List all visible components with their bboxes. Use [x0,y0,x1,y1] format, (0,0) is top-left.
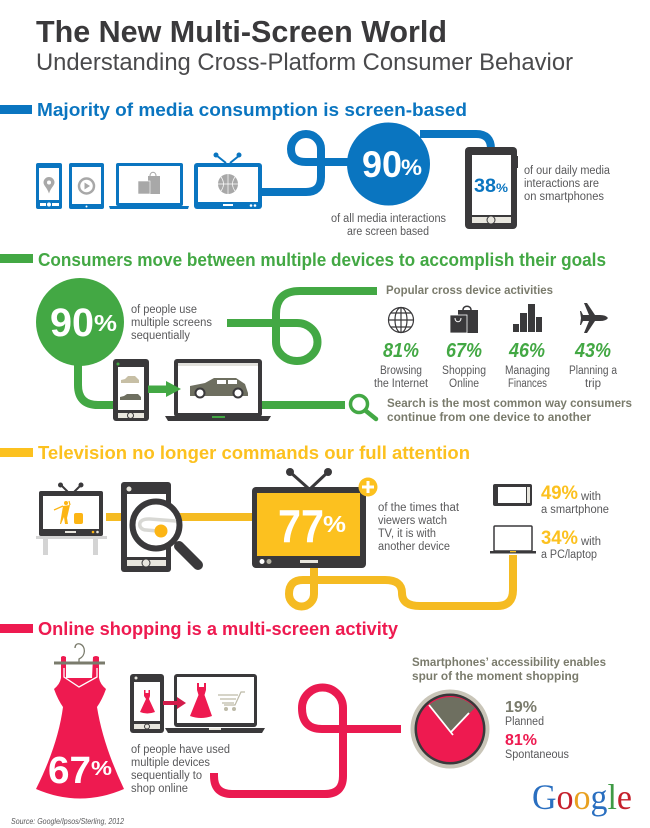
icon: red dress on hanger [36,644,124,798]
stat: 34% with a PC/laptop [541,528,601,561]
connector pipe: yellow horizontal [106,513,254,521]
stat circle: 90% sequential: % [94,310,117,336]
stat: 81% spontaneous: Spontaneous [505,749,569,761]
stat: 81% spontaneous: 81% [505,732,537,749]
labels: activity names [374,365,618,390]
stat: 49% with a smartphone: 49% [541,483,578,504]
icon: small laptop [490,526,536,554]
icon: smartphone showing 38% [465,147,518,229]
chart: clock pie 19 / 81 [410,690,490,768]
icon: tablet with play button [69,163,104,209]
callout: search [387,396,632,424]
caption: all media interactions: are screen based [347,226,429,238]
title: Understanding Cross-Platform Consumer Behavior [36,49,573,76]
icon: laptop with dress and cart [165,674,265,733]
caption: daily media interactions: of our daily media [524,165,611,177]
connector pipe: blue loop [260,134,350,192]
caption: multiple devices: of people have used [131,744,230,756]
stat: 81% spontaneous [505,732,569,761]
panel: online shopping [0,618,606,798]
labels: activity names: Finances [508,378,547,390]
stat: 49% with a smartphone: with [580,491,601,503]
panel: television [0,442,609,606]
stat circle: 90% screen based: 90 [362,144,402,185]
heading: media consumption: Majority of media consumption is screen-based [37,99,467,120]
icon: large television with 77%: 77 [278,500,324,552]
stat circle: 90% sequential [36,278,124,366]
callout: search: Search is the most common way consumers [387,396,632,410]
connector pipe: red loop to clock [214,687,401,794]
caption: viewers watch tv: TV, it is with [378,528,436,540]
source note: Source: Google/Ipsos/Sterling, 2012 [11,816,124,826]
panel: multiple devices [0,249,632,424]
icon: phone with map pin [36,163,62,209]
stat: 49% with a smartphone [541,483,609,516]
icon: television with basketball [194,152,262,209]
labels: activity names: Planning a [569,365,618,377]
subheading: spur of the moment [412,655,606,683]
caption: viewers watch tv [378,502,460,553]
stat: 19% planned: Planned [505,716,544,728]
caption: daily media interactions: interactions are [524,178,599,190]
icon: shopping bags [450,306,478,333]
heading: television: Television no longer commands our full attention [38,442,470,463]
caption: multiple devices: sequentially to [131,770,202,782]
icon: bar chart [513,304,542,332]
icon: smartphone showing 38%: % [496,181,508,195]
caption: viewers watch tv: viewers watch [378,515,447,527]
caption: multiple screens [131,304,212,342]
stat: 49% with a smartphone: a smartphone [541,504,609,516]
stats: activity percentages: 67% [446,340,482,362]
caption: daily media interactions [524,165,611,203]
caption: multiple devices: multiple devices [131,757,210,769]
subheading: popular activities: Popular cross device activities [386,283,553,297]
icon: red dress on hanger: % [91,758,112,780]
stat: 34% with a PC/laptop: 34% [541,528,578,549]
subheading: spur of the moment: Smartphones’ accessibility enables [412,655,606,669]
icon: laptop with shopping bags [109,163,189,209]
stat circle: 90% screen based [347,122,430,206]
heading: online shopping: Online shopping is a multi-screen activity [38,618,399,639]
caption: multiple devices [131,744,230,795]
caption: all media interactions: of all media interactions [331,213,446,225]
icon: laptop with car [165,359,271,421]
labels: activity names: trip [585,378,601,390]
callout: search: continue from one device to another [387,410,591,424]
caption: multiple screens: of people use [131,304,197,316]
labels: activity names: the Internet [374,378,429,390]
icon: plus badge [358,478,378,496]
stats: activity percentages: 81% [383,340,419,362]
caption: viewers watch tv: another device [378,541,450,553]
caption: multiple screens: sequentially [131,330,190,342]
connector pipe: green from circle to phone [78,362,118,405]
icon: phone with cars [113,359,149,421]
stats: activity percentages: 43% [574,340,611,362]
connector pipe: green six loop [227,291,377,361]
stat circle: 90% sequential: 90 [50,301,94,345]
icon: green magnifier [350,396,376,419]
arrow: phone to laptop [148,381,181,397]
icon: phone with magnifier [121,482,198,572]
caption: viewers watch tv: of the times that [378,502,460,514]
stat: 34% with a PC/laptop: with [580,536,601,548]
icon: smartphone showing 38%: 38 [474,176,496,197]
connector pipe: green from laptop to magnifier [258,401,345,409]
icon: horizontal smartphone [493,484,532,506]
arrow: phone to laptop [163,697,186,709]
caption: multiple devices: shop online [131,783,188,795]
labels: activity names: Managing [505,365,550,377]
labels: activity names: Shopping [442,365,486,377]
icon: small television on stand [36,482,107,555]
stats: activity percentages: 46% [508,340,545,362]
stats: activity percentages [383,340,611,362]
icon: red dress on hanger: 67 [48,750,91,792]
icon: globe [388,308,414,332]
heading: multiple devices: Consumers move between multiple devices to accomplish their goals [38,249,606,270]
caption: multiple screens: multiple screens [131,317,212,329]
stat: 34% with a PC/laptop: a PC/laptop [541,549,597,561]
connector pipe: blue to phone [420,134,491,152]
title [36,14,573,76]
labels: activity names: Online [449,378,479,390]
icon: large television with 77%: % [323,511,346,537]
logo: Google: Google [532,777,632,817]
title: The New Multi-Screen World [36,14,447,49]
icon: large television with 77% [252,468,366,568]
connector pipe: yellow loop to laptop [289,555,513,606]
caption: all media interactions [331,213,446,238]
subheading: spur of the moment: spur of the moment shopping [412,669,579,683]
labels: activity names: Browsing [380,365,422,377]
stat: 19% planned: 19% [505,699,537,716]
panel: media consumption [0,99,611,238]
icon: airplane [580,303,608,333]
caption: daily media interactions: on smartphones [524,191,604,203]
icon: phone with dress [130,674,164,733]
stat: 19% planned [505,699,544,728]
stat circle: 90% screen based: % [401,155,422,180]
